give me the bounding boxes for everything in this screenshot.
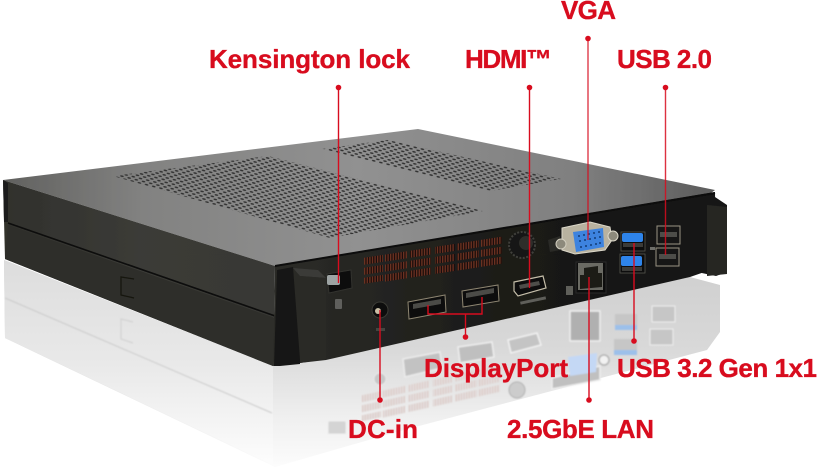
callout: 2.5GbE LAN: 2.5GbE LAN — [507, 414, 654, 444]
callout: USB 2.0 — [617, 44, 712, 255]
perforated vent: front — [113, 156, 483, 238]
VGA connector — [548, 222, 618, 254]
perforated vent: rear — [322, 140, 561, 191]
callout: USB 3.2 Gen 1x1: USB 3.2 Gen 1x1 — [617, 353, 817, 383]
right bracket — [697, 197, 727, 276]
top cover — [3, 129, 715, 266]
callout: HDMI: HDMI™ — [465, 44, 552, 74]
callout: DisplayPort: DisplayPort — [424, 353, 568, 383]
callout: Kensington lock — [209, 44, 411, 283]
thumb screw — [509, 232, 535, 258]
callout: Kensington lock: Kensington lock — [209, 44, 411, 74]
left side panel — [3, 180, 275, 366]
callout: USB 2.0: USB 2.0 — [617, 44, 712, 74]
rear panel — [273, 192, 716, 366]
callout: DC-in: DC-in — [348, 414, 418, 444]
icon: Kensington lock slot — [327, 270, 352, 309]
callout: DC-in — [348, 310, 418, 444]
left bracket — [274, 267, 326, 366]
device chassis — [3, 129, 727, 366]
DC-in jack — [372, 302, 388, 331]
callout: 2.5GbE LAN — [507, 277, 654, 444]
DisplayPort connectors — [408, 285, 499, 319]
ventilation grill — [364, 237, 502, 285]
USB 3.2 Gen 1 ports — [620, 232, 645, 273]
HDMI connector — [514, 276, 546, 305]
callout: DisplayPort — [424, 297, 568, 383]
reflection of the device — [4, 260, 720, 467]
callout: VGA — [561, 0, 616, 240]
callout: HDMI — [465, 44, 552, 288]
USB 2.0 ports — [650, 226, 680, 266]
callout: USB 3.2 Gen 1x1 — [617, 243, 817, 383]
LAN port — [566, 262, 606, 295]
